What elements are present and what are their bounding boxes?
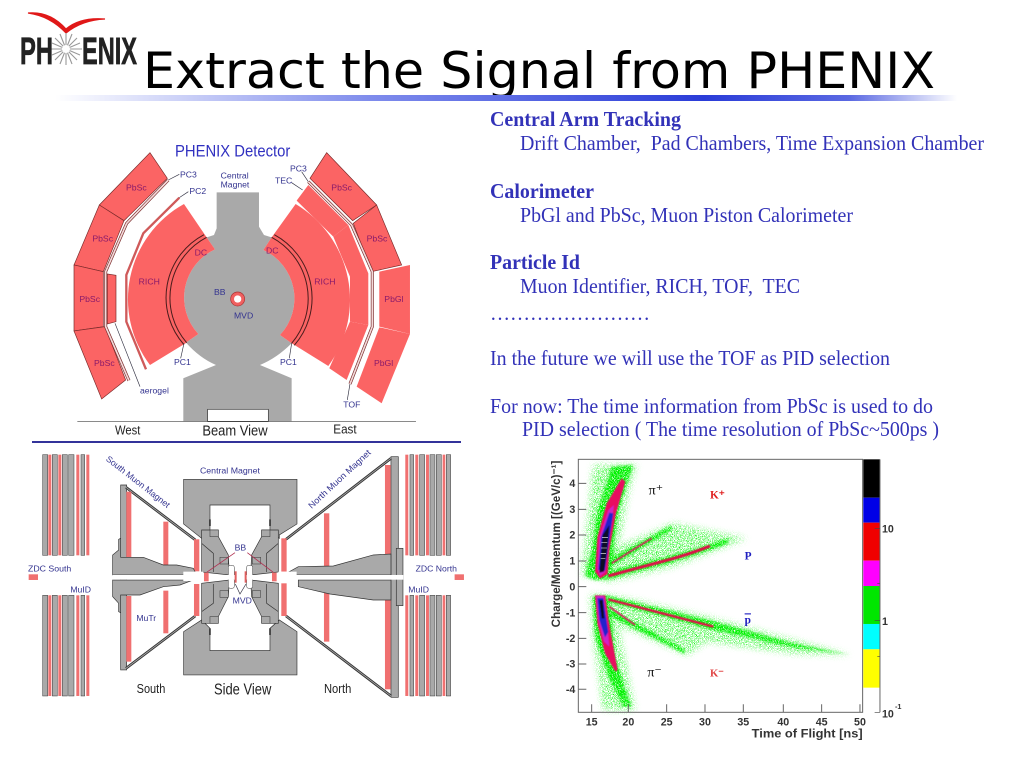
y axis numbers: -2 — [566, 633, 575, 645]
beam view labels: PbSc — [331, 183, 353, 193]
beam view captions: West — [115, 423, 141, 437]
side view labels — [28, 447, 457, 623]
x axis numbers — [586, 716, 866, 728]
pion core white ticks — [601, 537, 608, 559]
panel: detector description text: …………………… — [490, 301, 650, 325]
positive branch green density — [585, 465, 850, 707]
y axis numbers: 2 — [569, 530, 575, 542]
x axis numbers: 15 — [586, 716, 598, 728]
panel: PHENIX beam view diagram — [74, 141, 416, 439]
beam view labels: Magnet — [221, 179, 250, 189]
west calorimeter sectors — [74, 153, 215, 399]
beam view labels: TOF — [343, 399, 360, 409]
panel: detector description text: Central Arm Tracking — [490, 107, 681, 131]
beam view labels: PbGl — [384, 294, 404, 304]
title: Extract the Signal from PHENIX — [143, 42, 935, 100]
side view captions: Side View — [214, 681, 272, 698]
baseline rule — [77, 420, 416, 422]
east calorimeter sectors — [263, 153, 410, 403]
y axis numbers: 1 — [569, 556, 575, 568]
muon piston shields — [113, 538, 391, 613]
side view captions: North — [324, 682, 351, 696]
y axis numbers: -4 — [566, 684, 575, 696]
side view labels: North Muon Magnet — [306, 447, 373, 510]
y axis numbers — [566, 478, 575, 696]
side view labels: MuID — [408, 585, 429, 595]
side view labels: BB — [235, 543, 246, 553]
beam view labels: RICH — [139, 277, 160, 287]
beam view labels: BB — [214, 287, 226, 297]
beam pipe MVD ring — [231, 292, 245, 306]
BB counters and MVD leaders — [204, 553, 277, 594]
panel: detector description text: In the future we will use the TOF as PID selection — [490, 346, 890, 370]
particle labels: p — [745, 614, 751, 626]
ZDC detectors — [29, 574, 464, 580]
side view labels: MuTr — [136, 613, 156, 623]
beam view labels — [79, 164, 404, 409]
side view labels: ZDC South — [28, 564, 72, 574]
colour scale: 10 — [882, 524, 894, 536]
beam view labels: PbSc — [92, 233, 114, 243]
diagram heading: PHENIX Detector — [175, 141, 291, 160]
colour scale — [863, 459, 901, 720]
side view labels: Central Magnet — [200, 465, 261, 475]
colour scale: 1 — [882, 616, 888, 628]
beam view labels: DC — [195, 247, 207, 257]
muon magnets — [121, 457, 403, 697]
beam view labels: TEC — [275, 176, 292, 186]
muon trackers — [126, 465, 391, 689]
beam view labels: Central — [221, 170, 249, 180]
beam view labels: PbSc — [94, 358, 115, 368]
beam view labels: PC3 — [290, 164, 307, 174]
colour scale: 10 — [882, 708, 894, 720]
icon: PHENIX logo: PH — [20, 31, 53, 73]
negative branch density bands — [595, 595, 713, 672]
panel: detector description text: Calorimeter — [490, 179, 594, 203]
y axis numbers: -1 — [566, 607, 575, 619]
x axis numbers: 25 — [661, 716, 673, 728]
title underline bar — [55, 95, 957, 101]
x axis numbers: 50 — [854, 716, 866, 728]
beam view labels: DC — [266, 245, 278, 255]
particle labels: π⁻ — [647, 666, 662, 681]
beam view labels: PC1 — [280, 357, 297, 367]
particle labels: π⁺ — [649, 483, 663, 498]
x axis numbers: 40 — [777, 716, 789, 728]
panel: detector description text: Particle Id — [490, 250, 580, 274]
particle labels: P — [745, 551, 752, 563]
beam view labels: aerogel — [140, 385, 169, 395]
leader lines — [115, 172, 350, 400]
side view labels: MVD — [233, 596, 252, 606]
MuID south top plates — [43, 455, 89, 555]
panel: detector description text: Muon Identifier, RICH, TOF, TEC — [520, 274, 800, 298]
plot frame and ticks — [578, 459, 863, 712]
MuID north top plates — [405, 455, 451, 555]
speckled background — [582, 465, 850, 710]
panel: detector description text: For now: The time information from PbSc is used to do — [490, 394, 933, 418]
beam view captions — [115, 422, 357, 439]
particle labels: K⁻ — [710, 669, 724, 680]
beam view labels: PC2 — [189, 186, 206, 196]
side view labels: South Muon Magnet — [104, 454, 172, 510]
side view labels: ZDC North — [416, 564, 457, 574]
central magnet yokes — [184, 479, 297, 675]
particle labels — [647, 483, 752, 681]
side view labels: MuID — [70, 585, 91, 595]
side view captions: South — [137, 682, 165, 696]
beam view labels: RICH — [314, 277, 335, 287]
positive branch density bands — [595, 478, 710, 579]
beam view captions: Beam View — [202, 423, 268, 439]
MuID south bottom plates — [43, 595, 89, 696]
beam view labels: PbSc — [79, 294, 101, 304]
central magnet — [183, 192, 294, 422]
beam view labels: PbSc — [367, 233, 388, 243]
particle labels: K⁺ — [710, 490, 725, 502]
panel: detector description text: PID selection ( The time resolution of PbSc~500ps ) — [522, 417, 939, 441]
colour scale: -1 — [895, 702, 901, 711]
beam view labels: PC3 — [180, 170, 197, 180]
panel: PHENIX side view diagram — [28, 447, 464, 698]
beam pipe — [113, 575, 403, 580]
beam view labels: MVD — [234, 310, 253, 320]
y axis numbers: -3 — [566, 659, 575, 671]
x axis title: Time of Flight [ns] — [752, 727, 863, 741]
central trackers and nosecones — [183, 530, 297, 623]
y axis numbers: 4 — [569, 478, 575, 490]
x axis numbers: 30 — [699, 716, 711, 728]
divider — [32, 441, 461, 443]
x axis numbers: 35 — [737, 716, 749, 728]
side view captions — [137, 681, 351, 698]
panel: detector description text: PbGl and PbSc, Muon Piston Calorimeter — [520, 203, 853, 227]
chart: charge over momentum vs time of flight — [549, 459, 901, 741]
x axis numbers: 20 — [622, 716, 634, 728]
beam view labels: PbGl — [374, 358, 393, 368]
panel: detector description text — [490, 107, 984, 441]
MuID north bottom plates — [405, 595, 451, 696]
beam view labels: PbSc — [126, 183, 147, 193]
panel: detector description text: Drift Chamber, Pad Chambers, Time Expansion Chamber — [520, 131, 984, 155]
beam view labels: PC1 — [174, 357, 191, 367]
y axis numbers: 0 — [569, 581, 575, 593]
icon: PHENIX logo: ENIX — [82, 31, 137, 73]
icon: PHENIX logo — [20, 13, 137, 73]
y axis numbers: 3 — [569, 504, 575, 516]
y axis title: Charge/Momentum [(GeV/c)⁻¹] — [549, 461, 563, 627]
beam view captions: East — [333, 422, 357, 436]
x axis numbers: 45 — [816, 716, 828, 728]
